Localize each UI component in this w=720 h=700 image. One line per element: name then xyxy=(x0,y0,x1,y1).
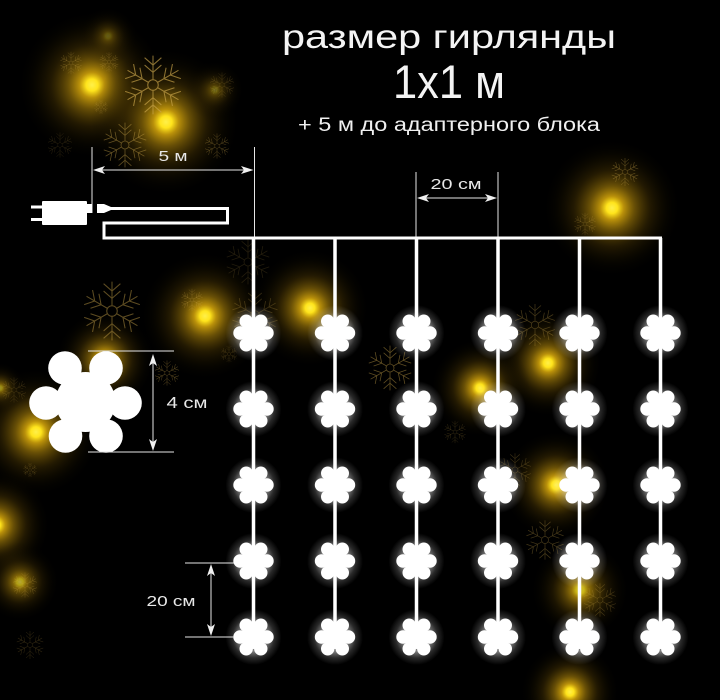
subtitle: + 5 м до адаптерного блока xyxy=(298,115,601,136)
dimension: 5 m cord length xyxy=(92,147,254,238)
title: размер гирлянды xyxy=(282,18,616,55)
vertical strands xyxy=(254,238,660,640)
dimension: 20 cm strand spacing: 20 см xyxy=(430,176,482,193)
dimension: 20 cm strand spacing xyxy=(416,172,498,238)
decorative background snowflakes xyxy=(1,52,639,659)
power adapter and plug xyxy=(31,201,111,225)
snowflake lights grid xyxy=(226,305,688,665)
dimension: 20 cm vertical spacing xyxy=(146,563,234,637)
cord and horizontal top wire xyxy=(104,208,662,238)
dimension: 4 cm snowflake size xyxy=(88,351,208,452)
size heading: 1х1 м xyxy=(393,55,505,108)
dimension: 4 cm snowflake size: 4 см xyxy=(166,395,208,412)
dimension: 20 cm vertical spacing: 20 см xyxy=(146,593,196,610)
dimension: 5 m cord length: 5 м xyxy=(158,148,188,165)
large snowflake icon xyxy=(29,351,142,453)
